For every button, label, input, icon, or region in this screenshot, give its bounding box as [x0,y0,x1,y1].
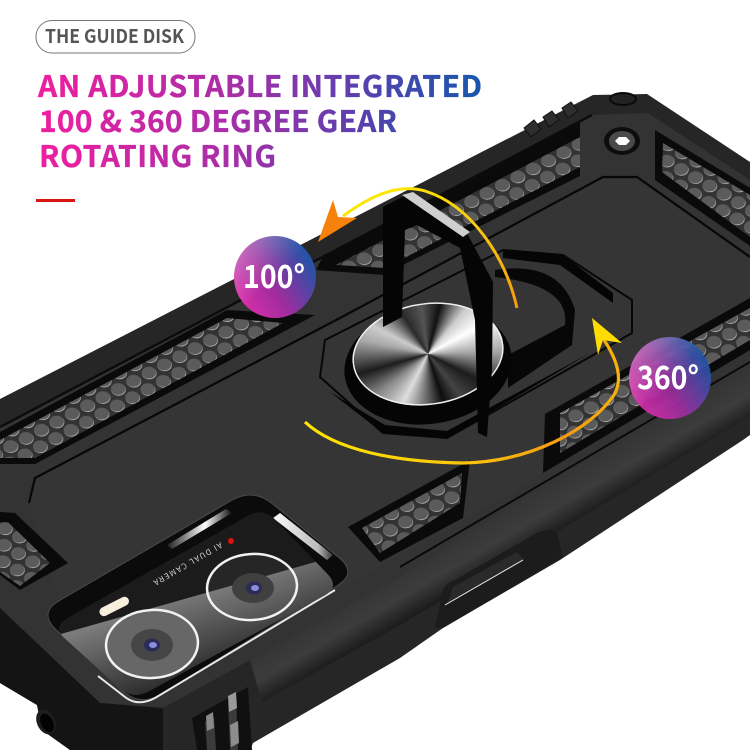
side gradient band [250,362,750,702]
badge: 100 degrees: 100° [243,252,305,298]
hex strip: upper left [316,122,580,275]
plate lower edge line [400,362,750,567]
lens large [104,607,200,681]
arrow: 100 degree arc [318,189,517,308]
badge: 360 degrees: 360° [637,353,699,399]
side button [435,530,563,628]
title: ROTATING RING [39,132,276,176]
camera frame [48,495,348,700]
lanyard hole [604,127,640,155]
arrow: 360 degree arc [305,318,622,463]
camera module [48,495,348,710]
hex strip: upper right [655,130,750,246]
standing ring [383,192,493,437]
arrowhead [318,200,357,242]
top edge hole [610,93,636,105]
hex strip: lower left [0,512,68,590]
red dot [228,538,234,544]
grip stripes [192,687,252,750]
frame reflection top [167,509,232,549]
lens small [205,551,299,623]
ring top highlight [402,192,470,237]
badge: 100 degrees [234,236,316,318]
title: AN ADJUSTABLE INTEGRATED [37,62,482,106]
top button cluster [524,102,578,137]
octagon ring mount [320,250,632,438]
audio jack [32,706,60,738]
badge: 360 degrees [629,337,711,419]
hex strip: middle left [0,310,315,464]
title: 100 & 360 DEGREE GEAR [39,97,397,141]
lower left side [0,608,163,750]
badge pill: THE GUIDE DISK [45,22,185,49]
ring base [337,295,519,435]
back plate outline [29,177,750,503]
frame lower highlight [98,590,335,702]
hex strip: lower middle [348,460,470,562]
flat ring back [495,268,575,388]
frame reflection right [273,513,333,560]
arrowhead [592,318,622,355]
flash [98,595,131,618]
hex strip: middle right [543,298,750,473]
metallic disc [346,293,510,415]
glass lower panel [61,562,333,695]
back plate [29,177,750,600]
title [37,62,482,176]
camera label: AI DUAL CAMERA [151,539,224,588]
bevel top dark line [0,115,592,427]
red accent line [36,199,75,202]
case front bevel [0,113,750,708]
camera glass [59,512,333,695]
